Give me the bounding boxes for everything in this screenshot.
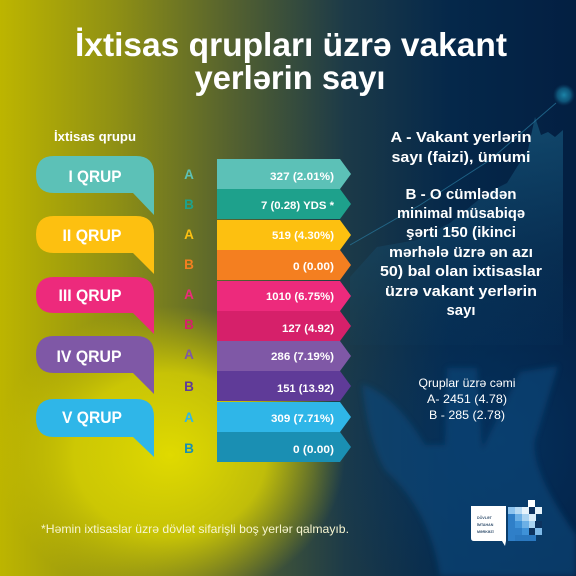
A/B letters bbox=[184, 167, 194, 456]
bar: V QRUP A: 309 (7.71%) bbox=[271, 413, 334, 425]
logo: MƏRKƏZİ bbox=[477, 530, 494, 534]
A/B letters: B bbox=[184, 379, 194, 394]
legend text: mərhələ üzrə ən azı bbox=[389, 245, 533, 261]
logo bbox=[471, 500, 542, 546]
title: İxtisas qrupları üzrə vakant bbox=[75, 26, 507, 63]
A/B letters: B bbox=[184, 257, 194, 272]
legend text: 50) bal olan ixtisaslar bbox=[380, 264, 542, 280]
legend text: sayı bbox=[446, 303, 476, 319]
legend text bbox=[380, 130, 542, 319]
A/B letters: A bbox=[184, 410, 194, 425]
bubble: IV QRUP bbox=[36, 336, 154, 394]
totals text: A- 2451 (4.78) bbox=[427, 392, 507, 406]
A/B letters: B bbox=[184, 317, 194, 332]
legend text: şərti 150 (ikinci bbox=[406, 225, 516, 241]
bar: II QRUP B bbox=[217, 250, 351, 280]
bar: I QRUP A: 327 (2.01%) bbox=[270, 171, 334, 183]
bar: V QRUP B bbox=[217, 432, 351, 462]
legend text: sayı (faizi), ümumi bbox=[392, 150, 530, 166]
bubble: III QRUP: III QRUP bbox=[58, 287, 122, 305]
A/B letters: A bbox=[184, 287, 194, 302]
title: yerlərin sayı bbox=[194, 59, 386, 96]
bar: II QRUP A: 519 (4.30%) bbox=[272, 230, 334, 242]
logo: DÖVLƏT bbox=[477, 515, 493, 520]
bar: IV QRUP A: 286 (7.19%) bbox=[271, 351, 334, 363]
bar: V QRUP A bbox=[217, 402, 351, 432]
bar: III QRUP B bbox=[217, 311, 351, 341]
legend text: A - Vakant yerlərin bbox=[390, 130, 532, 146]
bar: IV QRUP B: 151 (13.92) bbox=[277, 383, 334, 395]
totals text bbox=[418, 376, 516, 422]
bar: II QRUP A bbox=[217, 220, 351, 250]
totals text: Qruplar üzrə cəmi bbox=[418, 376, 516, 390]
title bbox=[75, 26, 507, 96]
background: rising chart bbox=[350, 84, 575, 345]
bubble: II QRUP: II QRUP bbox=[62, 227, 122, 245]
bubble: IV QRUP: IV QRUP bbox=[56, 348, 122, 366]
legend text: B - O cümlədən bbox=[406, 187, 516, 203]
A/B letters: B bbox=[184, 197, 194, 212]
bubble: V QRUP bbox=[36, 399, 154, 457]
bar: IV QRUP B bbox=[217, 371, 351, 401]
bar: III QRUP A bbox=[217, 281, 351, 311]
bar: I QRUP B bbox=[217, 189, 351, 219]
bubble: II QRUP bbox=[36, 216, 154, 274]
bubble: I QRUP bbox=[36, 156, 154, 215]
column heading: İxtisas qrupu bbox=[54, 129, 136, 144]
legend text: minimal müsabiqə bbox=[397, 206, 525, 222]
footnote: *Həmin ixtisaslar üzrə dövlət sifarişli boş yerlər qalmayıb. bbox=[41, 522, 349, 536]
bar: III QRUP A: 1010 (6.75%) bbox=[266, 291, 334, 303]
legend text: üzrə vakant yerlərin bbox=[385, 284, 537, 300]
totals text: B - 285 (2.78) bbox=[429, 408, 505, 422]
bubble: V QRUP: V QRUP bbox=[62, 409, 122, 427]
logo: İMTAHAN bbox=[477, 523, 494, 527]
background: hand silhouette bbox=[362, 366, 576, 576]
bar: II QRUP B: 0 (0.00) bbox=[293, 261, 334, 273]
bubble: I QRUP: I QRUP bbox=[68, 168, 122, 186]
A/B letters: A bbox=[184, 167, 194, 182]
bubble: III QRUP bbox=[36, 277, 154, 334]
bar: III QRUP B: 127 (4.92) bbox=[282, 323, 334, 335]
bar: I QRUP B: 7 (0.28) YDS * bbox=[261, 200, 335, 212]
A/B letters: A bbox=[184, 227, 194, 242]
bar: I QRUP A bbox=[217, 159, 351, 189]
A/B letters: B bbox=[184, 441, 194, 456]
A/B letters: A bbox=[184, 347, 194, 362]
bar: IV QRUP A bbox=[217, 341, 351, 371]
bar: V QRUP B: 0 (0.00) bbox=[293, 444, 334, 456]
